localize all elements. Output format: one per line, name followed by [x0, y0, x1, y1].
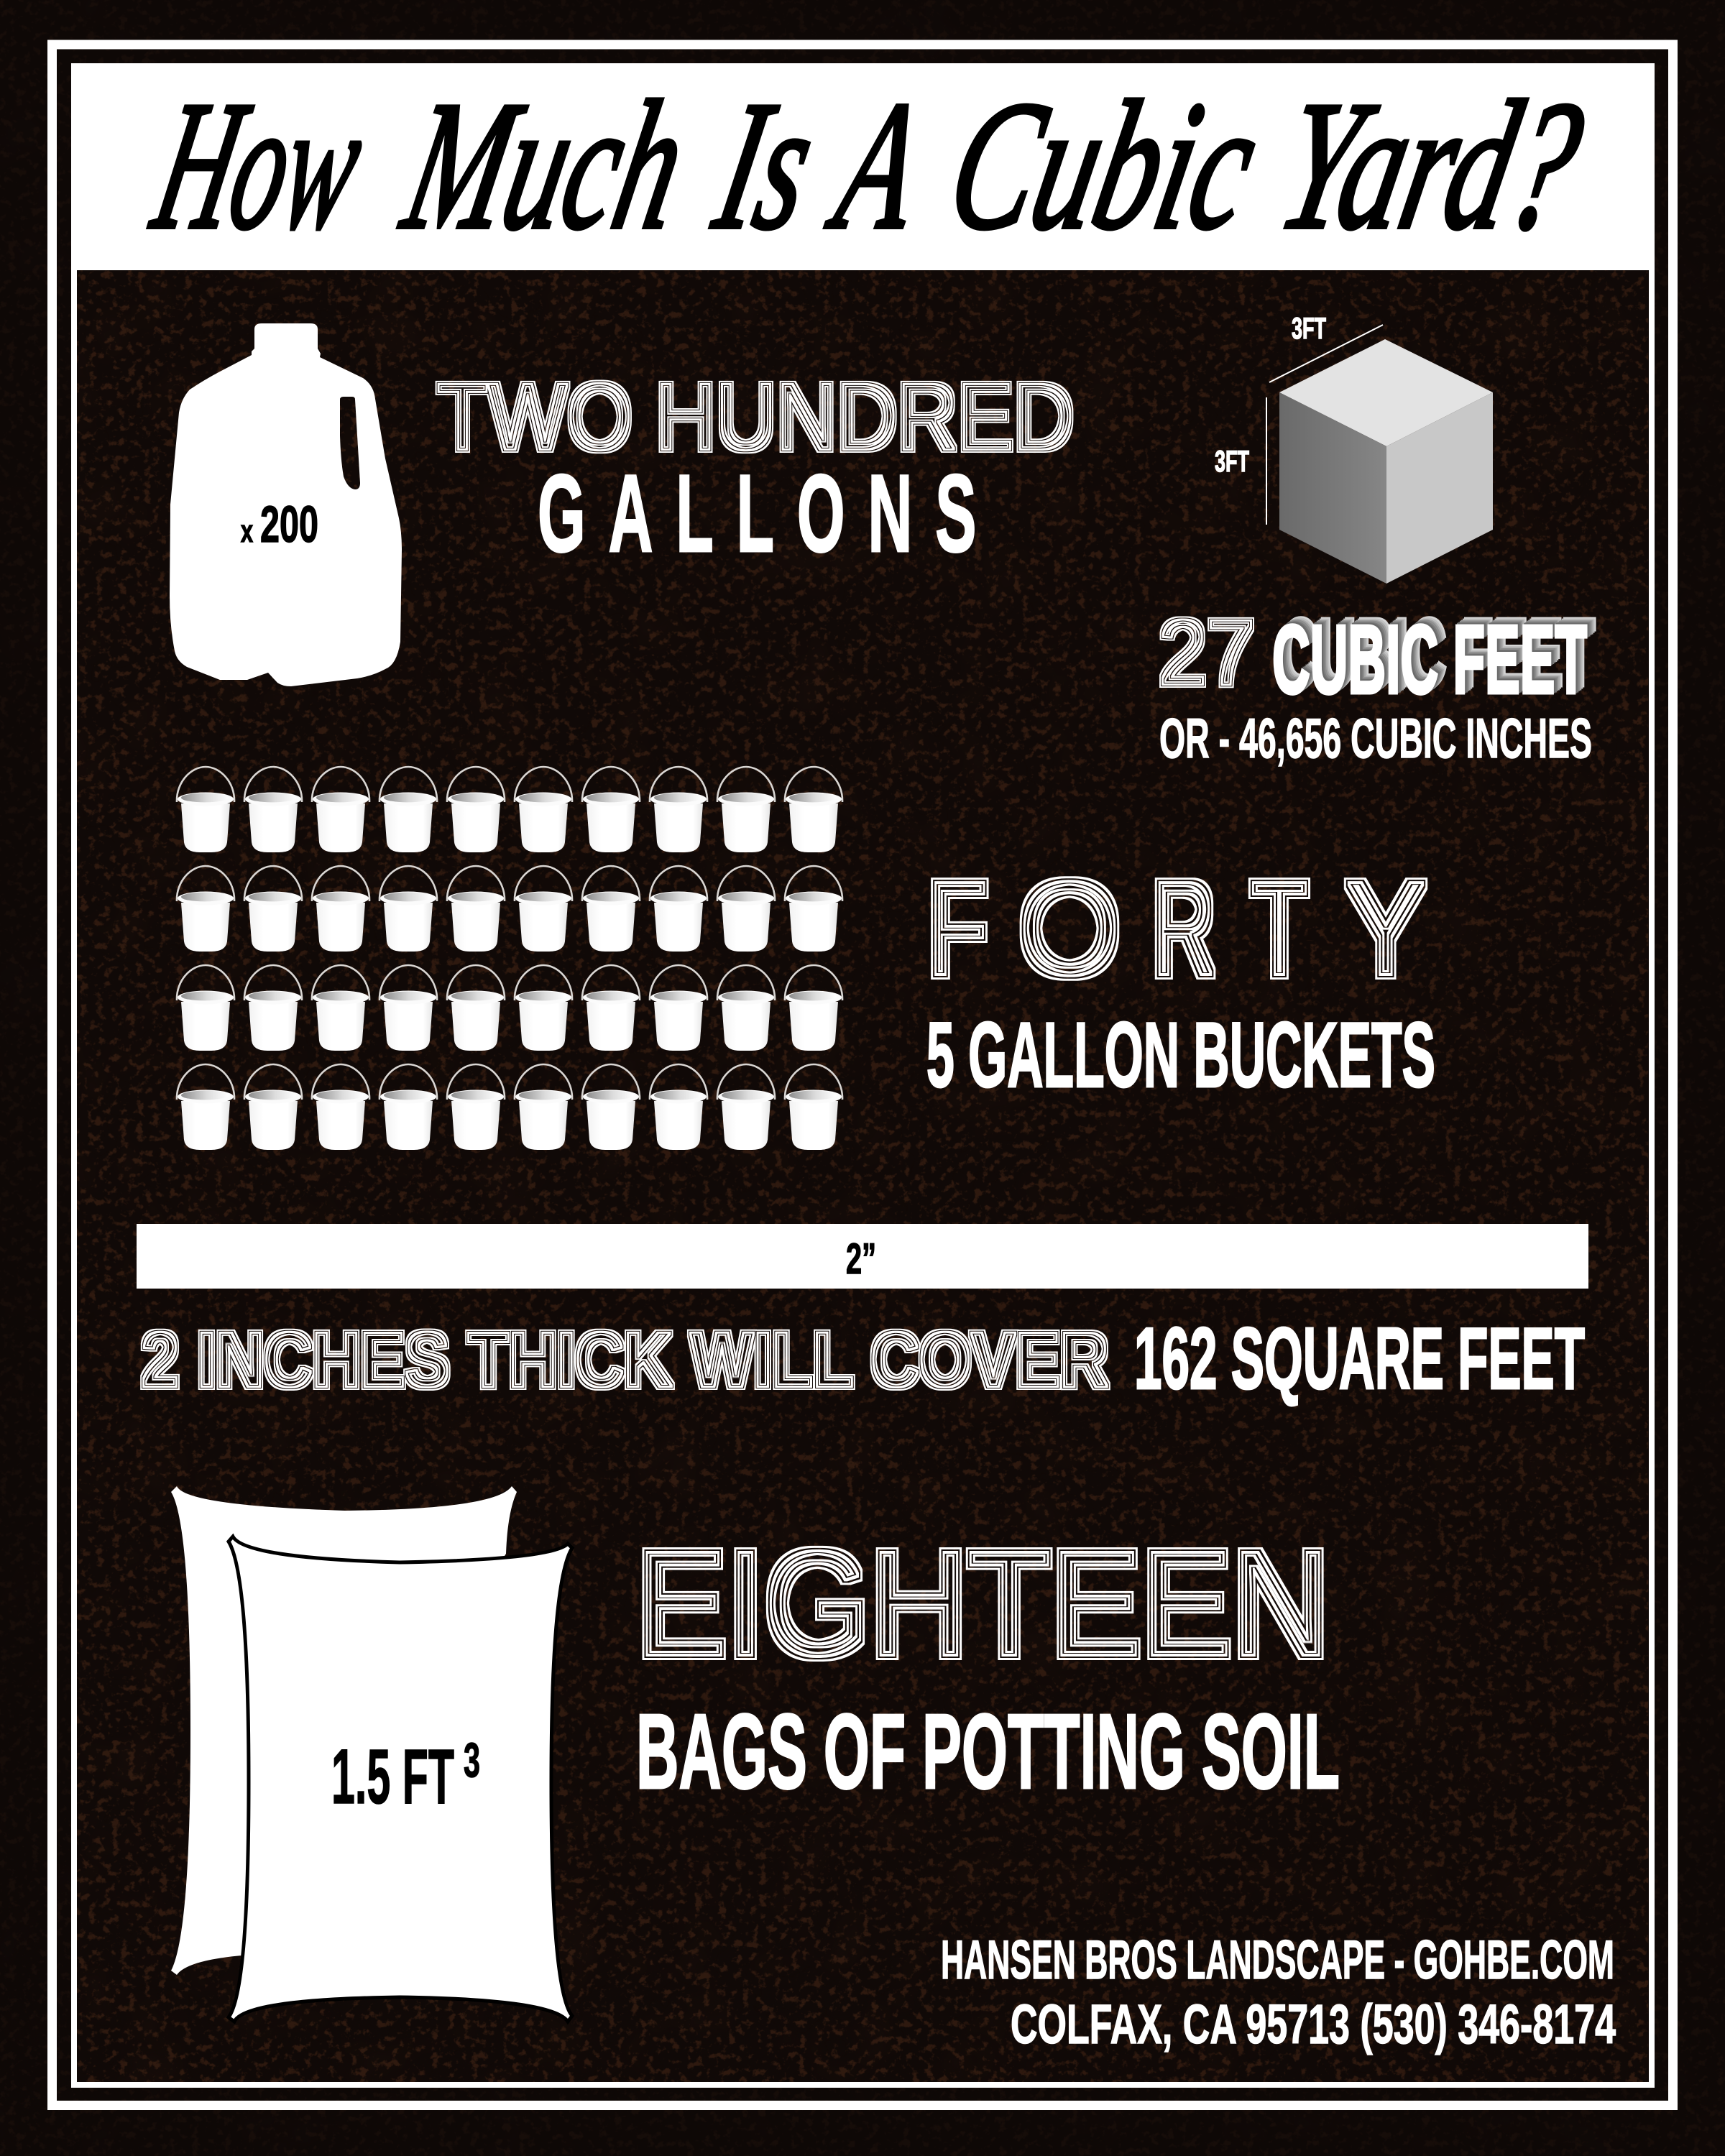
two inch strip [137, 1224, 1588, 1289]
footer contact [941, 1930, 1616, 2055]
heading: forty: O [1018, 854, 1121, 1002]
bag label: 1.5 FT [331, 1733, 454, 1820]
heading: forty [928, 854, 1425, 1002]
heading: eighteen: EIGHTEEN [636, 1521, 1330, 1686]
title banner [71, 63, 1655, 270]
cube diagram [1215, 311, 1493, 584]
bucket grid: forty buckets [177, 767, 842, 1150]
title: Is [700, 63, 830, 267]
jug label: 200 [260, 497, 318, 553]
title: How [139, 63, 380, 267]
title: Much [389, 63, 702, 267]
strip label: 2” [846, 1235, 876, 1283]
icon: soil bags [171, 1486, 572, 2022]
dimension line: height [1266, 397, 1267, 525]
bag superscript: 3 [464, 1733, 480, 1787]
title: Yard? [1265, 63, 1598, 267]
jug label [241, 497, 318, 553]
icon: gallon jug [170, 323, 402, 686]
label: 3ft side: 3FT [1215, 444, 1249, 478]
title: A [815, 63, 939, 267]
stat: 27: 27 [1159, 602, 1255, 704]
label: 3ft top: 3FT [1292, 311, 1326, 345]
heading: forty: F [928, 854, 988, 1002]
heading: two hundred: TWO HUNDRED [437, 364, 1074, 469]
heading: 2 inches thick will cover: 2 INCHES THICK WILL COVER [142, 1316, 1108, 1403]
title [139, 63, 1598, 267]
heading: forty: T [1251, 854, 1307, 1002]
title: Cubic [934, 63, 1273, 267]
dimension line: width [1269, 325, 1383, 382]
heading: forty: Y [1346, 854, 1425, 1002]
front bag [229, 1537, 572, 2022]
jug label: x [241, 514, 253, 549]
heading: forty: R [1153, 854, 1215, 1002]
heading: gallons: GALLONS [538, 453, 976, 575]
